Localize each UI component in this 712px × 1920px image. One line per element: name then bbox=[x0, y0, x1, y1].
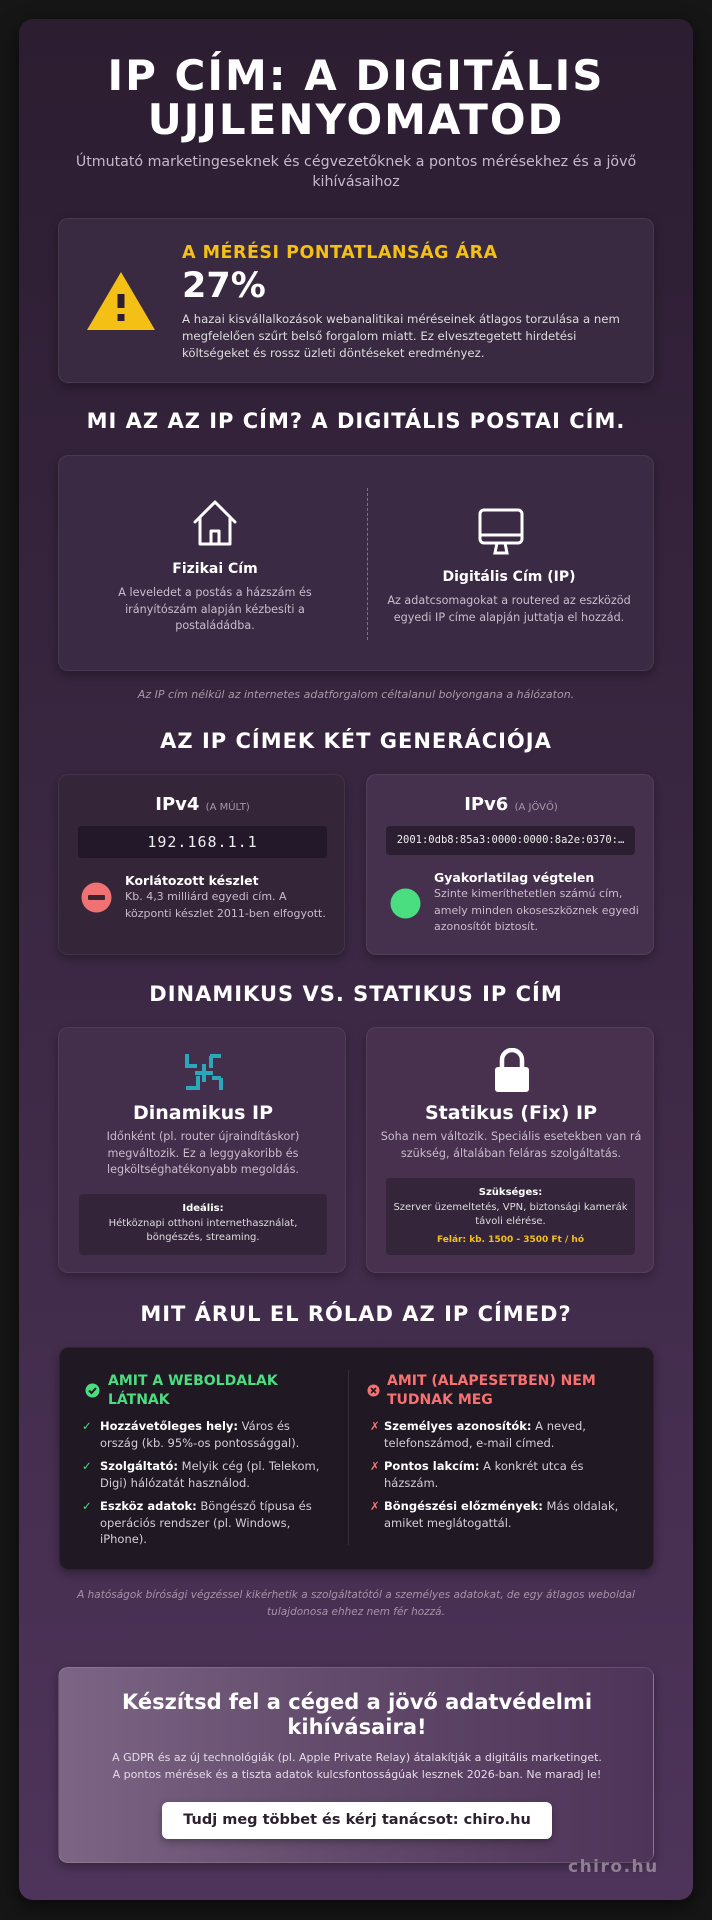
icon: check circle bbox=[86, 1384, 100, 1398]
column: hidden: ✗ bbox=[370, 1459, 380, 1473]
ideal box: böngészés, streaming. bbox=[146, 1232, 260, 1243]
title: IP CÍM: A DIGITÁLIS bbox=[108, 51, 604, 100]
code box bbox=[386, 826, 635, 855]
note: A hatóságok bírósági végzéssel kikérhetik a szolgáltatótól a személyes adatokat, de egy átlagos weboldal bbox=[77, 1589, 635, 1601]
note: tulajdonosa ehhez nem fér hozzá. bbox=[267, 1606, 445, 1618]
column: hidden: telefonszámod, e-mail címed. bbox=[384, 1436, 554, 1450]
subtitle: Útmutató marketingeseknek és cégvezetőknek a pontos mérésekhez és a jövő bbox=[76, 154, 636, 170]
column: visible bbox=[82, 1373, 319, 1546]
CTA button: Tudj meg többet és kérj tanácsot: chiro.hu bbox=[183, 1812, 531, 1828]
column: visible: ✓ bbox=[82, 1419, 92, 1433]
subtitle bbox=[76, 152, 636, 190]
panel: IPv6: Gyakorlatilag végtelen bbox=[434, 870, 594, 885]
CTA text bbox=[112, 1751, 602, 1780]
CTA text: A pontos mérések és a tiszta adatok kulcsfontosságúak lesznek 2026-ban. Ne maradj le! bbox=[113, 1768, 601, 1780]
code box: 2001:0db8:85a3:0000:0000:8a2e:0370:… bbox=[397, 834, 624, 846]
note: Az IP cím nélkül az internetes adatforgalom céltalanul bolyongana a hálózaton. bbox=[138, 688, 574, 701]
panel: address comparison: postaládádba. bbox=[175, 619, 255, 632]
panel: address comparison: egyedi IP címe alapján juttatja el hozzád. bbox=[394, 610, 624, 624]
column: hidden bbox=[368, 1373, 618, 1530]
panel: address comparison bbox=[58, 455, 654, 671]
panel: address comparison: A leveledet a postás a házszám és bbox=[118, 586, 312, 599]
heading: what is IP: MI AZ AZ IP CÍM? A DIGITÁLIS POSTAI CÍM. bbox=[87, 409, 625, 433]
panel: IPv4: Korlátozott készlet bbox=[125, 873, 259, 888]
icon: green dot bbox=[390, 888, 420, 918]
panel: address comparison: irányítószám alapján kézbesíti a bbox=[125, 602, 305, 616]
column: hidden: ✗ bbox=[370, 1499, 380, 1513]
panel: dynamic IP: Dinamikus IP bbox=[133, 1102, 273, 1124]
icon: monitor bbox=[478, 508, 524, 554]
CTA text: A GDPR és az új technológiák (pl. Apple Private Relay) átalakítják a digitális marketinget. bbox=[112, 1751, 602, 1764]
panel: static IP bbox=[366, 1027, 654, 1273]
panel: IPv4: IPv4 (A MÚLT) bbox=[155, 794, 250, 815]
panel: dynamic IP bbox=[58, 1027, 346, 1273]
column: hidden: házszám. bbox=[384, 1476, 438, 1490]
ideal box: Ideális: bbox=[182, 1203, 224, 1214]
column: hidden: Személyes azonosítók: A neved, bbox=[384, 1419, 586, 1433]
column: hidden: TUDNAK MEG bbox=[387, 1392, 493, 1408]
panel: static IP: Statikus (Fix) IP bbox=[425, 1102, 597, 1124]
note bbox=[76, 1589, 635, 1618]
required box: Szerver üzemeltetés, VPN, biztonsági kamerák bbox=[393, 1202, 628, 1212]
column: hidden: Pontos lakcím: A konkrét utca és bbox=[384, 1459, 584, 1473]
column: visible: ✓ bbox=[82, 1459, 92, 1473]
code box: 192.168.1.1 bbox=[147, 833, 258, 851]
panel: IPv6: amely minden okoseszköznek egyedi bbox=[434, 904, 639, 916]
column: hidden: ✗ bbox=[370, 1419, 380, 1433]
code box bbox=[78, 826, 327, 858]
CTA button bbox=[162, 1802, 552, 1839]
column: visible: ország (kb. 95%-os pontossággal). bbox=[100, 1436, 299, 1450]
panel: IPv6: azonosítót biztosít. bbox=[434, 920, 538, 933]
panel: dynamic IP: legköltséghatékonyabb megoldás. bbox=[107, 1163, 299, 1176]
panel: call to action bbox=[58, 1667, 654, 1863]
panel: dynamic IP: Időnként (pl. router újraindításkor) bbox=[107, 1130, 299, 1143]
column: visible: iPhone). bbox=[100, 1532, 147, 1546]
column: visible: operációs rendszer (pl. Windows, bbox=[100, 1516, 290, 1530]
subtitle: kihívásaihoz bbox=[312, 174, 400, 190]
required box: távoli elérése. bbox=[475, 1216, 546, 1227]
required box: Felár: kb. 1500 - 3500 Ft / hó bbox=[437, 1234, 584, 1244]
column: visible: AMIT A WEBOLDALAK bbox=[108, 1373, 278, 1389]
title: UJJLENYOMATOD bbox=[148, 95, 564, 144]
column: visible: Hozzávetőleges hely: Város és bbox=[100, 1419, 290, 1433]
CTA heading: kihívásaira! bbox=[287, 1715, 427, 1739]
icon: x circle bbox=[368, 1384, 380, 1396]
column: visible: Szolgáltató: Melyik cég (pl. Telekom, bbox=[100, 1459, 319, 1473]
ideal box bbox=[79, 1194, 327, 1255]
panel: IPv4 bbox=[58, 774, 345, 955]
CTA heading: Készítsd fel a céged a jövő adatvédelmi bbox=[122, 1690, 592, 1714]
icon: house bbox=[193, 500, 237, 546]
column: visible: Eszköz adatok: Böngésző típusa és bbox=[100, 1499, 312, 1513]
column: visible: ✓ bbox=[82, 1499, 92, 1513]
panel: visible vs hidden bbox=[59, 1347, 654, 1570]
ideal box: Hétköznapi otthoni internethasználat, bbox=[109, 1218, 297, 1228]
column: visible: LÁTNAK bbox=[108, 1392, 170, 1408]
required box: Szükséges: bbox=[479, 1187, 542, 1198]
watermark: chiro.hu bbox=[568, 1857, 659, 1877]
icon: lock bbox=[495, 1048, 529, 1092]
CTA heading bbox=[122, 1690, 592, 1739]
body text: A hazai kisvállalkozások webanalitikai méréseinek átlagos torzulása a nem bbox=[182, 312, 620, 326]
panel: IPv6: Szinte kimeríthetetlen számú cím, bbox=[434, 887, 622, 900]
panel: alert cost bbox=[58, 218, 654, 383]
body text: költségeket és rossz üzleti döntéseket eredményez. bbox=[182, 346, 484, 360]
column: hidden: Böngészési előzmények: Más oldalak, bbox=[384, 1499, 618, 1513]
divider bbox=[367, 488, 368, 640]
body text: megfelelően szűrt belső forgalom miatt. Ez elvesztegetett hirdetési bbox=[182, 329, 576, 343]
panel: static IP: szükség, általában feláras szolgáltatás. bbox=[401, 1146, 621, 1160]
column: hidden: AMIT (ALAPESETBEN) NEM bbox=[387, 1373, 596, 1389]
column: visible: Digi) hálózatát használod. bbox=[100, 1476, 250, 1490]
required box bbox=[386, 1178, 635, 1255]
heading: what IP reveals: MIT ÁRUL EL RÓLAD AZ IP CÍMED? bbox=[140, 1302, 572, 1326]
heading: A MÉRÉSI PONTATLANSÁG ÁRA bbox=[182, 243, 498, 263]
panel: address comparison: Az adatcsomagokat a routered az eszközöd bbox=[387, 594, 631, 607]
heading: generations: AZ IP CÍMEK KÉT GENERÁCIÓJA bbox=[160, 729, 552, 753]
label: physical: Fizikai Cím bbox=[172, 561, 258, 577]
panel: IPv6: IPv6 (A JÖVŐ) bbox=[464, 794, 558, 815]
label: digital: Digitális Cím (IP) bbox=[442, 569, 576, 585]
divider bbox=[348, 1370, 349, 1545]
panel: IPv4: központi készlet 2011-ben elfogyott. bbox=[125, 906, 326, 920]
panel: IPv6 bbox=[366, 774, 654, 955]
body text bbox=[182, 312, 620, 360]
icon: minus bbox=[82, 882, 112, 912]
icon: warning bbox=[87, 272, 155, 330]
icon: dynamic bbox=[185, 1054, 223, 1090]
column: hidden: amiket meglátogattál. bbox=[384, 1516, 512, 1530]
panel: static IP: Soha nem változik. Speciális esetekben van rá bbox=[381, 1130, 641, 1143]
title bbox=[108, 51, 604, 144]
panel: dynamic IP: megváltozik. Ez a leggyakoribb és bbox=[108, 1146, 298, 1160]
panel: IPv4: Kb. 4,3 milliárd egyedi cím. A bbox=[125, 890, 287, 903]
stat: 27% bbox=[182, 266, 266, 306]
heading: dynamic vs static: DINAMIKUS VS. STATIKUS IP CÍM bbox=[149, 982, 563, 1006]
